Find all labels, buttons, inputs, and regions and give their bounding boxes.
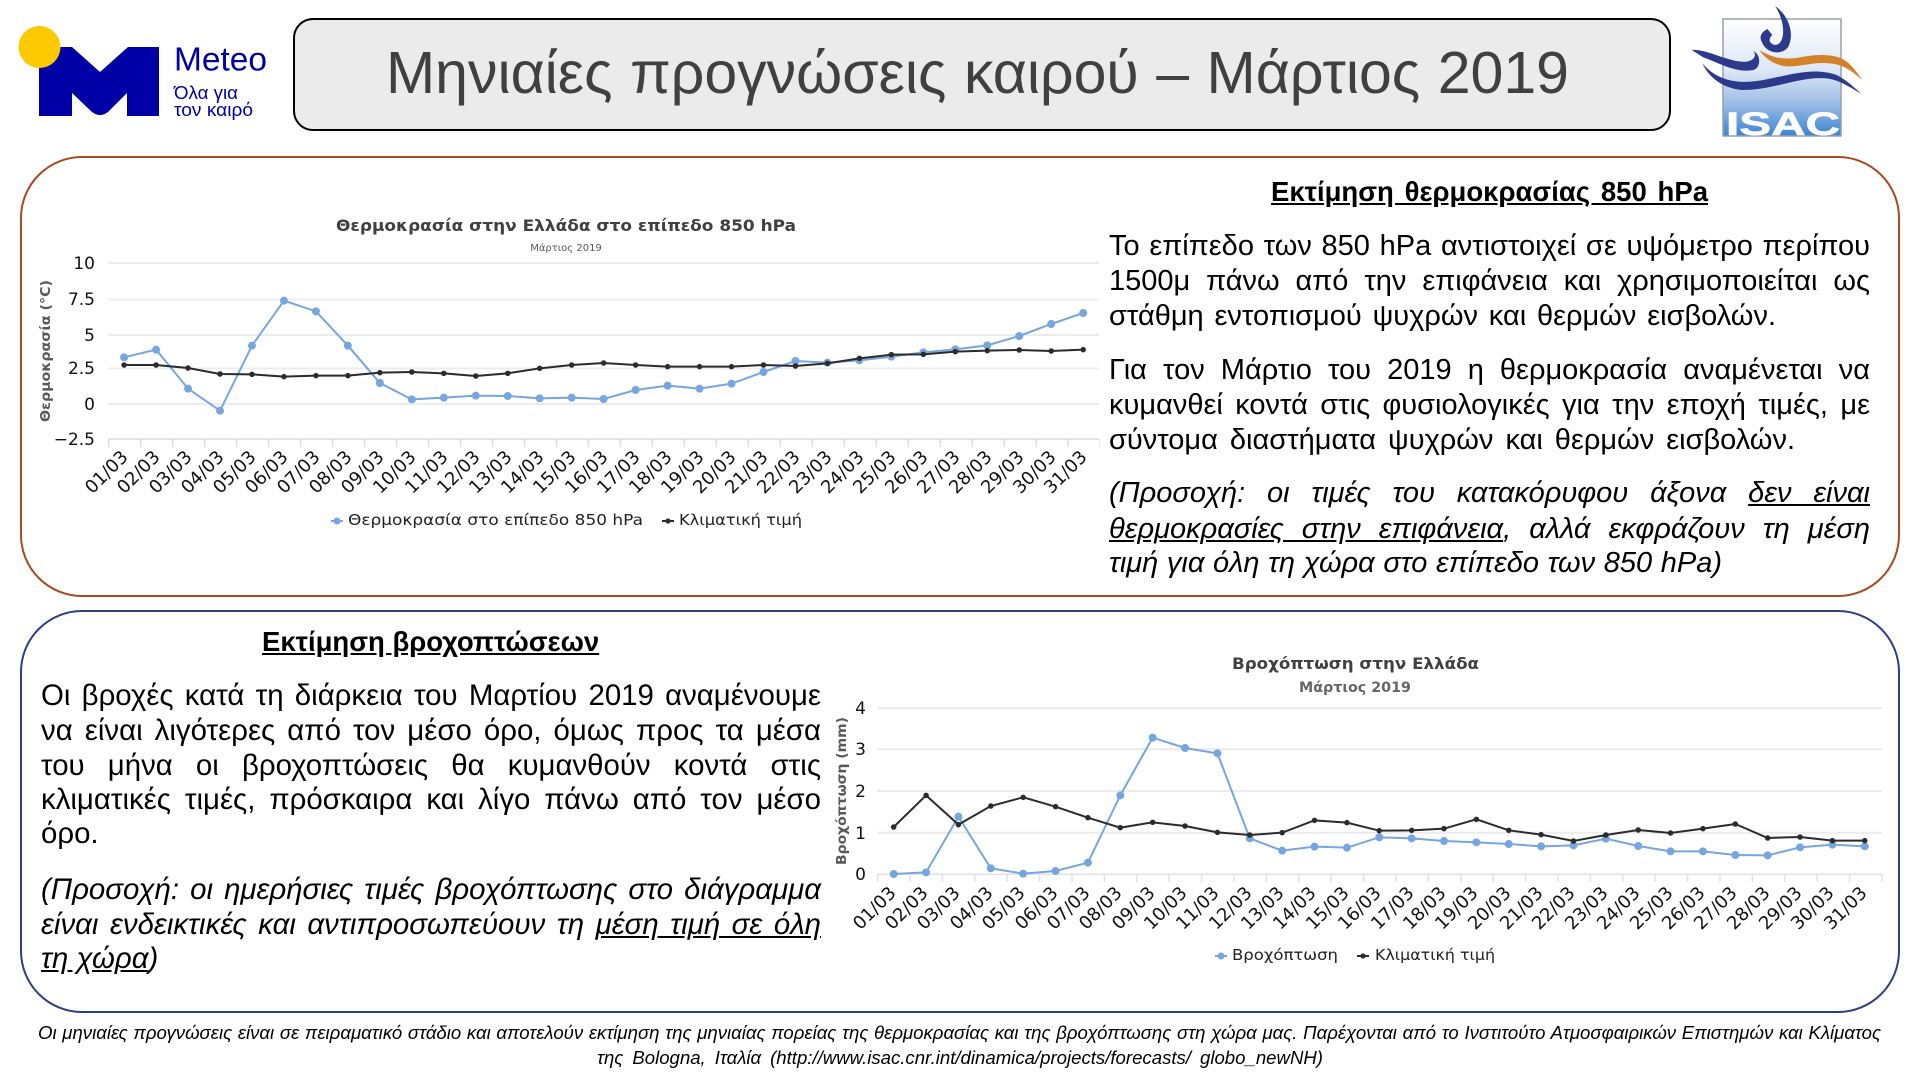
text: 850 hPa description: στάθμη εντοπισμού ψυχρών και θερμών εισβολών. — [1109, 300, 1776, 332]
x axis labels: 24/03 — [817, 447, 869, 498]
x axis labels: 02/03 — [113, 447, 165, 498]
icon: blue M — [39, 47, 159, 116]
legend: Θερμοκρασία στο επίπεδο 850 hPa — [348, 511, 643, 529]
text: 850 hPa description — [1109, 230, 1870, 332]
logo: ISAC — [1692, 6, 1862, 142]
logo tagline second line: τον καιρό — [174, 99, 253, 120]
text: precipitation caution note — [41, 873, 822, 975]
x axis labels: 22/03 — [1528, 883, 1580, 934]
x axis labels: 08/03 — [305, 447, 357, 498]
x axis labels: 23/03 — [785, 447, 837, 498]
x axis labels — [849, 883, 1872, 934]
footer note: Οι μηνιαίες προγνώσεις είναι σε πειραματικό στάδιο και αποτελούν εκτίμηση της μηνιαίας πορείας της θερμοκρασίας και της βροχόπτωσης στη χώρα μας. Παρέχονται από το Ινστιτούτο Ατμοσφαιρικών Επιστημών και Κλίματος — [38, 1022, 1881, 1043]
x axis labels: 07/03 — [1043, 883, 1095, 934]
y axis labels: 4 — [855, 699, 866, 719]
logo square — [1723, 19, 1841, 136]
icon: yellow sun — [18, 26, 60, 68]
x axis labels: 18/03 — [1399, 883, 1451, 934]
x axis labels: 11/03 — [401, 447, 453, 498]
series: temperature at 850 hPa — [124, 301, 1083, 411]
y axis labels — [855, 699, 866, 885]
x axis labels: 14/03 — [1269, 883, 1321, 934]
x axis labels: 30/03 — [1787, 883, 1839, 934]
text: March 2019 temperature outlook: σύντομα διαστήματα ψυχρών και θερμών εισβολών. — [1109, 424, 1795, 456]
x axis labels: 29/03 — [977, 447, 1029, 498]
x axis labels: 06/03 — [241, 447, 293, 498]
legend: Κλιματική τιμή — [679, 511, 802, 529]
legend — [331, 511, 802, 529]
x axis labels: 15/03 — [529, 447, 581, 498]
text: 850 hPa description: 1500μ πάνω από την επιφάνεια και χρησιμοποιείται ως — [1109, 265, 1870, 297]
title: Μηνιαίες προγνώσεις καιρού – Μάρτιος 2019 — [386, 40, 1569, 106]
x axis labels: 15/03 — [1302, 883, 1354, 934]
x axis labels: 04/03 — [177, 447, 229, 498]
x axis labels: 10/03 — [1140, 883, 1192, 934]
text: precipitation caution note: τη χώρα) — [41, 942, 158, 975]
x axis labels: 03/03 — [913, 883, 965, 934]
panel: temperature 850 hPa — [20, 156, 1900, 597]
chart title: Βροχόπτωση στην Ελλάδα — [1232, 654, 1479, 673]
chart subtitle: Μάρτιος 2019 — [1299, 680, 1411, 696]
x axis labels: 22/03 — [753, 447, 805, 498]
logo swooshes — [1692, 6, 1863, 94]
y axis title: Θερμοκρασία (°C) — [39, 280, 54, 422]
text: precipitation outlook: του μήνα οι βροχοπτώσεις θα κυμανθούν κοντά στις — [41, 749, 821, 782]
text: temperature caution note: θερμοκρασίες στην επιφάνεια, αλλά εκφράζουν τη μέση — [1109, 513, 1870, 545]
x axis labels: 25/03 — [1626, 883, 1678, 934]
x axis labels: 23/03 — [1561, 883, 1613, 934]
x axis labels — [81, 447, 1092, 498]
legend — [1215, 946, 1495, 964]
x axis labels: 05/03 — [978, 883, 1030, 934]
x axis labels: 16/03 — [561, 447, 613, 498]
chart title: Θερμοκρασία στην Ελλάδα στο επίπεδο 850 hPa — [336, 216, 796, 235]
x axis labels: 12/03 — [1205, 883, 1257, 934]
x axis labels: 18/03 — [625, 447, 677, 498]
x axis labels: 28/03 — [1723, 883, 1775, 934]
y axis labels: 2.5 — [68, 359, 95, 379]
logo tagline: Όλα για — [173, 82, 238, 103]
y axis title: Βροχόπτωση (mm) — [835, 717, 850, 865]
legend: Κλιματική τιμή — [1375, 946, 1495, 964]
y axis labels: 0 — [855, 865, 866, 885]
x axis labels: 11/03 — [1172, 883, 1224, 934]
x axis labels: 01/03 — [849, 883, 901, 934]
x axis labels: 31/03 — [1040, 447, 1092, 498]
y axis labels — [54, 254, 95, 450]
x axis labels: 13/03 — [1237, 883, 1289, 934]
y axis labels: 0 — [84, 395, 95, 415]
x axis labels: 03/03 — [145, 447, 197, 498]
x axis labels: 06/03 — [1011, 883, 1063, 934]
series: climatological value — [124, 350, 1083, 377]
text: precipitation outlook: κλιματικές τιμές, πρόσκαιρα και λίγο πάνω από τον μέσο — [41, 783, 821, 816]
x axis labels: 16/03 — [1334, 883, 1386, 934]
x axis labels: 30/03 — [1009, 447, 1061, 498]
x axis labels: 27/03 — [913, 447, 965, 498]
legend: Βροχόπτωση — [1232, 946, 1338, 964]
x axis labels: 10/03 — [369, 447, 421, 498]
x axis labels: 21/03 — [721, 447, 773, 498]
logo text: ISAC — [1726, 106, 1840, 142]
heading: temperature estimate: Εκτίμηση θερμοκρασίας 850 hPa — [1271, 176, 1708, 207]
x axis labels: 13/03 — [465, 447, 517, 498]
text: precipitation caution note: (Προσοχή: οι ημερήσιες τιμές βροχόπτωσης στο διάγραμμα — [41, 873, 821, 906]
y axis labels: 10 — [73, 254, 95, 274]
text: March 2019 temperature outlook — [1109, 354, 1870, 456]
footer note: της Bologna, Ιταλία (http://www.isac.cnr.int/dinamica/projects/forecasts/ globo_newNH) — [597, 1047, 1323, 1068]
x axis labels: 17/03 — [593, 447, 645, 498]
y axis labels: −2.5 — [54, 430, 95, 450]
line chart: temperature — [39, 216, 1100, 529]
x axis labels: 09/03 — [337, 447, 389, 498]
y axis labels: 1 — [855, 824, 866, 844]
series: climatological value — [894, 795, 1865, 841]
text: precipitation outlook: Οι βροχές κατά τη διάρκεια του Μαρτίου 2019 αναμένουμε — [41, 679, 821, 712]
x axis labels: 08/03 — [1075, 883, 1127, 934]
x axis labels: 17/03 — [1367, 883, 1419, 934]
series: precipitation — [894, 738, 1865, 874]
chart subtitle: Μάρτιος 2019 — [530, 242, 602, 254]
y axis labels: 2 — [855, 782, 866, 802]
x axis labels: 04/03 — [946, 883, 998, 934]
heading: precipitation estimate: Εκτίμηση βροχοπτώσεων — [262, 626, 599, 657]
logo wordmark: Meteo — [174, 40, 267, 78]
text: March 2019 temperature outlook: κυμανθεί κοντά στις φυσιολογικές για την εποχή τιμές, με — [1109, 389, 1870, 421]
text: temperature caution note — [1109, 477, 1870, 579]
x axis labels: 26/03 — [1658, 883, 1710, 934]
x axis labels: 12/03 — [433, 447, 485, 498]
x axis labels: 14/03 — [497, 447, 549, 498]
text: precipitation outlook — [41, 679, 821, 850]
y axis labels: 5 — [84, 326, 95, 346]
x axis labels: 05/03 — [209, 447, 261, 498]
title box — [293, 18, 1671, 131]
x axis labels: 07/03 — [273, 447, 325, 498]
text: March 2019 temperature outlook: Για τον Μάρτιο του 2019 η θερμοκρασία αναμένεται να — [1109, 354, 1870, 386]
x axis labels: 09/03 — [1108, 883, 1160, 934]
x axis labels: 29/03 — [1755, 883, 1807, 934]
text: precipitation caution note: είναι ενδεικτικές και αντιπροσωπεύουν τη μέση τιμή σε όλη — [41, 908, 821, 941]
panel: precipitation — [20, 610, 1900, 1013]
x axis labels: 01/03 — [81, 447, 133, 498]
x axis labels: 28/03 — [945, 447, 997, 498]
x axis labels: 26/03 — [881, 447, 933, 498]
x axis labels: 19/03 — [657, 447, 709, 498]
x axis labels: 31/03 — [1820, 883, 1872, 934]
x axis labels: 19/03 — [1431, 883, 1483, 934]
text: temperature caution note: (Προσοχή: οι τιμές του κατακόρυφου άξονα δεν είναι — [1109, 477, 1870, 509]
y axis labels: 3 — [855, 740, 866, 760]
x axis labels: 20/03 — [689, 447, 741, 498]
text: temperature caution note: τιμή για όλη τη χώρα στο επίπεδο των 850 hPa) — [1109, 547, 1722, 579]
text: 850 hPa description: Το επίπεδο των 850 hPa αντιστοιχεί σε υψόμετρο περίπου — [1109, 230, 1870, 262]
x axis labels: 02/03 — [881, 883, 933, 934]
y axis labels: 7.5 — [68, 290, 95, 310]
x axis labels: 21/03 — [1496, 883, 1548, 934]
x axis labels: 25/03 — [849, 447, 901, 498]
text: precipitation outlook: να είναι λιγότερες από τον μέσο όρο, όμως προς τα μέσα — [41, 714, 821, 747]
text: precipitation outlook: όρο. — [41, 817, 99, 850]
logo: Meteo — [18, 26, 267, 120]
footer note — [38, 1022, 1881, 1068]
x axis labels: 27/03 — [1690, 883, 1742, 934]
x axis labels: 24/03 — [1593, 883, 1645, 934]
line chart: precipitation — [835, 654, 1883, 964]
x axis labels: 20/03 — [1464, 883, 1516, 934]
